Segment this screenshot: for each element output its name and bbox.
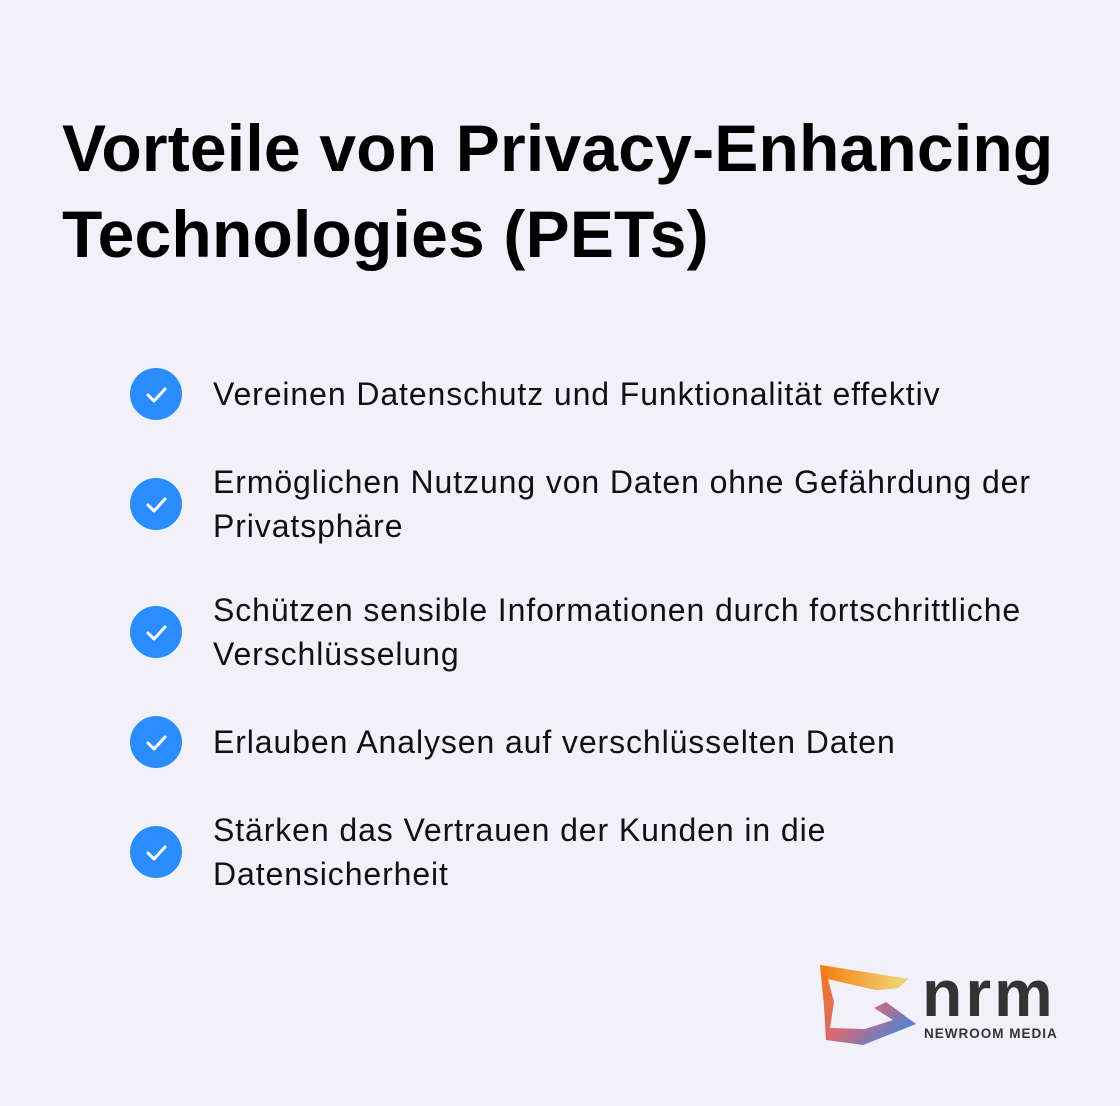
text: Schützen sensible Informationen durch fortschrittliche (213, 592, 1021, 628)
item 4 (130, 716, 896, 768)
logo: NEWROOM MEDIA (924, 1026, 1058, 1041)
title: Vorteile von Privacy-Enhancing (62, 111, 1053, 185)
title: Technologies (PETs) (62, 197, 709, 271)
text: Erlauben Analysen auf verschlüsselten Daten (213, 724, 896, 760)
icon: check (130, 606, 182, 658)
title (62, 111, 1053, 271)
item 2 (130, 464, 1031, 544)
text: Stärken das Vertrauen der Kunden in die (213, 812, 826, 848)
icon: check (130, 716, 182, 768)
text: Vereinen Datenschutz und Funktionalität effektiv (213, 376, 940, 412)
icon: check (130, 478, 182, 530)
item 1 (130, 368, 940, 420)
text: Ermöglichen Nutzung von Daten ohne Gefährdung der (213, 464, 1031, 500)
text (213, 592, 1021, 672)
text: Privatsphäre (213, 508, 403, 544)
text: Verschlüsselung (213, 636, 460, 672)
text: Datensicherheit (213, 856, 449, 892)
text (213, 464, 1031, 544)
icon: logo mark (820, 965, 916, 1045)
logo (820, 956, 1058, 1045)
item 5 (130, 812, 826, 892)
text (213, 812, 826, 892)
icon: check (130, 826, 182, 878)
icon: check (130, 368, 182, 420)
logo text: nrm (922, 956, 1056, 1030)
item 3 (130, 592, 1021, 672)
